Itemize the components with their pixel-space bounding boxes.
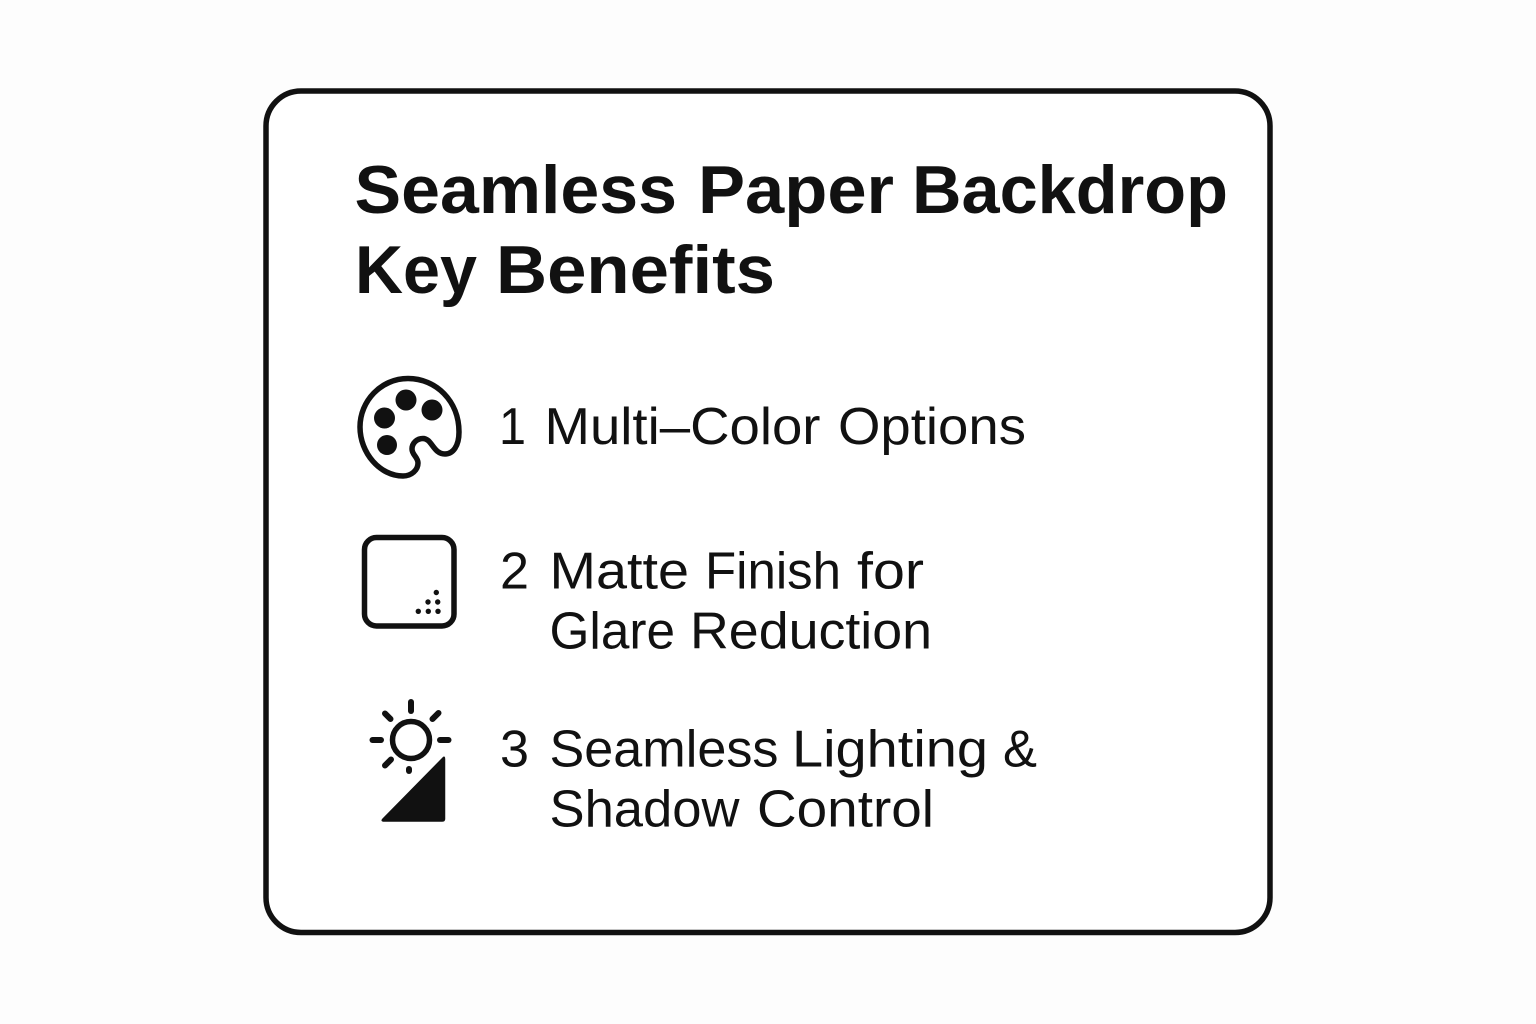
- title: Benefits: [496, 232, 775, 308]
- benefit 3 text: 3: [500, 720, 529, 778]
- benefit 2 text: 2: [500, 542, 529, 600]
- benefit 2 text: for: [857, 542, 924, 600]
- benefit 1 text: Options: [838, 398, 1026, 456]
- benefit 3 text: [500, 720, 1037, 838]
- benefit 3 text: Lighting: [792, 720, 988, 778]
- benefit 2 text: Glare: [550, 602, 675, 660]
- benefit 2 text: Finish: [705, 542, 841, 600]
- icon: palette: [360, 378, 459, 476]
- title: Key: [355, 232, 477, 308]
- benefit 1 text: [499, 398, 1026, 456]
- icon: matte square: [364, 538, 454, 626]
- benefit 3 text: Seamless: [550, 720, 778, 778]
- benefit 1 text: 1: [499, 398, 526, 456]
- benefit 2 text: Reduction: [690, 602, 932, 660]
- benefit 3 text: Shadow: [550, 780, 740, 838]
- title: Backdrop: [912, 152, 1228, 228]
- panel: key benefits card: [266, 91, 1270, 932]
- benefit 3 text: Control: [757, 780, 934, 838]
- benefit 2 text: Matte: [550, 542, 689, 600]
- title: [354, 152, 1228, 308]
- benefit 3 text: &: [1003, 720, 1037, 778]
- benefit 2 text: [500, 542, 932, 660]
- icon: sun and shadow: [372, 702, 448, 821]
- benefit 1 text: Multi–Color: [544, 398, 820, 456]
- title: Paper: [698, 152, 894, 228]
- title: Seamless: [354, 152, 677, 228]
